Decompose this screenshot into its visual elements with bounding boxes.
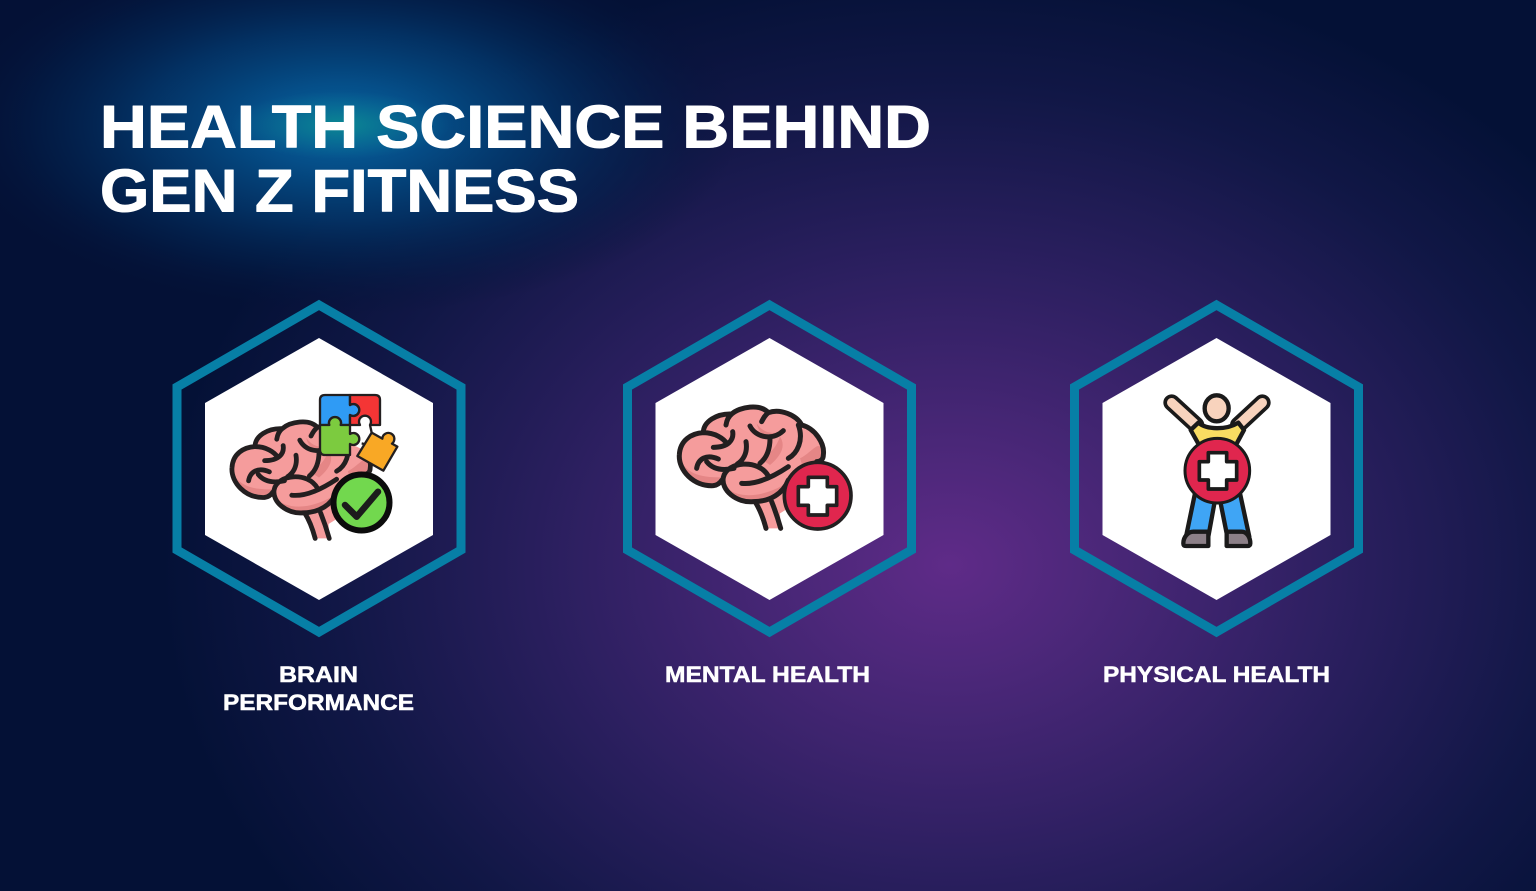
icon: medical badge — [784, 462, 851, 529]
label: PERFORMANCE — [223, 690, 414, 715]
label: MENTAL HEALTH — [665, 662, 870, 687]
icon: brain with puzzle and check — [232, 395, 397, 538]
label: BRAIN — [279, 662, 358, 687]
panel: physical health — [1074, 305, 1358, 687]
title: HEALTH SCIENCE BEHIND — [100, 94, 931, 160]
label: PHYSICAL HEALTH — [1103, 662, 1330, 687]
panel: mental health — [628, 305, 912, 687]
white hexagon — [656, 338, 884, 600]
white hexagon — [1102, 338, 1330, 600]
white hexagon — [205, 338, 433, 600]
icon: person with medical cross — [1172, 395, 1262, 546]
title — [100, 94, 931, 224]
panel: brain performance — [177, 305, 461, 715]
icon: brain with medical cross — [679, 407, 851, 529]
hexagon frame — [177, 305, 461, 632]
title: GEN Z FITNESS — [100, 158, 579, 224]
icon: check badge — [334, 474, 390, 530]
hexagon frame — [1074, 305, 1358, 632]
label — [223, 662, 414, 715]
icon: puzzle pieces — [320, 395, 397, 471]
hexagon frame — [628, 305, 912, 632]
